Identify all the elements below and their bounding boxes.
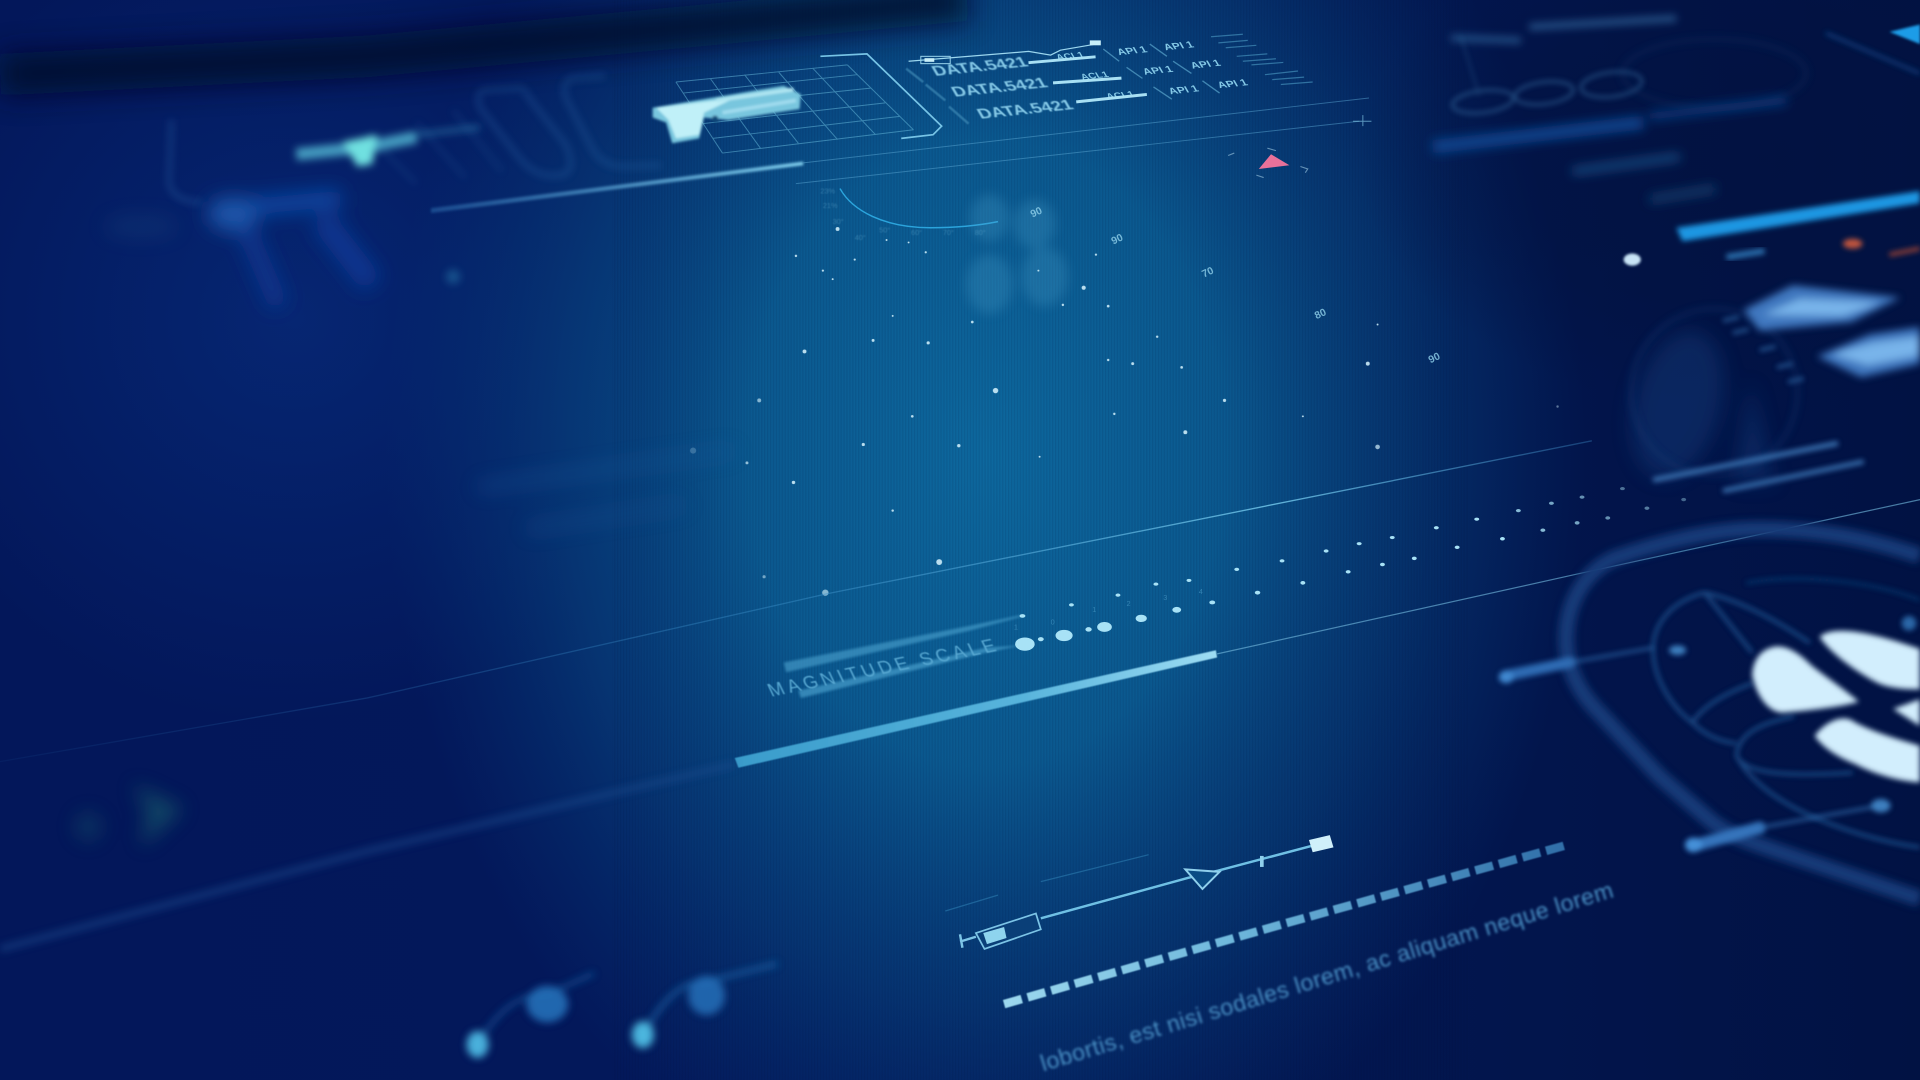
radar arc: [840, 189, 998, 228]
outer ring: [1566, 529, 1920, 899]
node dot: [1902, 616, 1916, 631]
row 3: DATA.5421: [973, 96, 1077, 122]
row 2: API 1: [1141, 64, 1175, 77]
arc tick labels: 40°: [855, 233, 866, 242]
side label: [1899, 429, 1920, 434]
scale digits: 4: [1199, 587, 1203, 596]
scale digits: 1: [1092, 605, 1096, 614]
blurred particle: [446, 269, 460, 284]
scale label: MAGNITUDE SCALE: [764, 635, 1001, 700]
magnitude scale chart: [764, 487, 1686, 700]
row 1: API 1: [1115, 45, 1149, 58]
node 1: [467, 973, 594, 1058]
bottom left blurred nodes: [75, 784, 778, 1058]
row 1: DATA.5421: [928, 53, 1031, 79]
small slash separators: [1103, 44, 1220, 99]
row 1: API 1: [1162, 40, 1196, 53]
slider tick: [1260, 856, 1264, 867]
slider line: [1041, 844, 1320, 918]
main progress bar: [0, 500, 1920, 949]
row 3: ACL1: [1104, 90, 1137, 102]
row 3: API 1: [1166, 84, 1201, 97]
light bars: [1744, 285, 1920, 377]
scale dots: [1015, 487, 1686, 651]
degree labels: 90: [1029, 205, 1044, 220]
scale digits: [1014, 587, 1203, 631]
slider triangle: [1185, 869, 1220, 889]
grid lines: [676, 65, 913, 153]
long thin line upper: [0, 441, 1592, 762]
row 2: [948, 58, 1223, 100]
syringe slider widget: [945, 835, 1616, 1076]
radar blobs: [966, 195, 1068, 313]
arc tick labels: [820, 186, 986, 242]
divider bar: [431, 162, 803, 213]
blurred label: [1727, 251, 1764, 257]
thin divider lines: [796, 98, 1369, 184]
degree labels: [1029, 205, 1442, 366]
blurred left streaks: [478, 451, 735, 529]
arc tick labels: 60°: [911, 228, 922, 237]
icon: warning triangle: [1228, 148, 1308, 178]
row 1: [928, 40, 1196, 79]
dim globe: [1615, 319, 1776, 489]
pointer bottom: [1685, 799, 1891, 852]
scale digits: 3: [1163, 593, 1167, 602]
bar right thin line: [1217, 500, 1920, 654]
scale digits: 0: [1051, 617, 1055, 626]
row 1: ACL1: [1054, 51, 1087, 62]
cyan corner: [1889, 24, 1920, 44]
arc tick labels: 30°: [833, 217, 844, 226]
left slant ticks: [906, 69, 969, 124]
white node: [1624, 253, 1641, 266]
scale bars: [784, 615, 1022, 672]
icon: pistol: [653, 86, 801, 143]
scale digits: 2: [1127, 599, 1131, 608]
small labels: [1723, 317, 1804, 382]
right small lines: [1211, 34, 1313, 84]
blue bands: [1433, 100, 1787, 200]
row 3: [973, 78, 1250, 122]
faint dim blob: [104, 216, 178, 238]
panel outline: [820, 54, 942, 138]
node 2: [632, 964, 778, 1048]
arc tick labels: 50°: [879, 226, 890, 235]
syringe box: [960, 913, 1041, 949]
bar left fade: [0, 764, 735, 949]
dashed progress: [1004, 845, 1567, 1004]
degree labels: 90: [1110, 232, 1125, 247]
caption text: lobortis, est nisi sodales lorem, ac aliquam neque lorem: [1037, 877, 1616, 1076]
slider square: [1309, 835, 1333, 852]
blurred gun icon: [296, 127, 480, 167]
dim chevrons: [75, 784, 184, 847]
radar map: [690, 186, 1559, 596]
arc tick labels: 23%: [820, 186, 836, 195]
row 2: ACL1: [1079, 70, 1111, 82]
panel: target grid with gun: [431, 54, 1371, 213]
white lobes: [1752, 631, 1920, 782]
row 2: DATA.5421: [948, 74, 1051, 100]
scale digits: 1: [1014, 622, 1018, 631]
degree labels: 70: [1200, 265, 1216, 280]
blurred blue box: [208, 197, 372, 306]
blurred title text bars: [1451, 18, 1676, 40]
inner globe lines: [1653, 579, 1920, 847]
globe outline: [1631, 309, 1798, 475]
panel: right middle blurred globe: [1615, 285, 1920, 491]
row 3: API 1: [1215, 78, 1250, 91]
arc tick labels: 21%: [823, 201, 838, 210]
ring icons: [1451, 37, 1643, 116]
pointer top: [1499, 645, 1686, 683]
degree labels: 90: [1427, 351, 1442, 366]
slider line: [909, 40, 1101, 64]
panel: data rows: [906, 34, 1313, 124]
panel: right lower orbit diagram: [1499, 529, 1920, 899]
lower bars: [1653, 443, 1864, 491]
degree labels: 80: [1313, 307, 1328, 322]
faint hex emblem: [1622, 39, 1806, 108]
cyan status bar: [1676, 191, 1920, 241]
orange marks: [1843, 239, 1920, 255]
panel: blurred left schematic: [104, 76, 661, 306]
icon: cross marker: [1353, 115, 1371, 126]
blurred rounded outlines: [169, 76, 661, 202]
faint dash above: [945, 855, 1149, 911]
arc tick labels: 80°: [975, 228, 986, 237]
row 2: API 1: [1188, 58, 1223, 71]
arc tick labels: 70°: [943, 228, 954, 237]
panel: right upper blurred interface: [1433, 18, 1920, 266]
star points: [690, 227, 1559, 596]
